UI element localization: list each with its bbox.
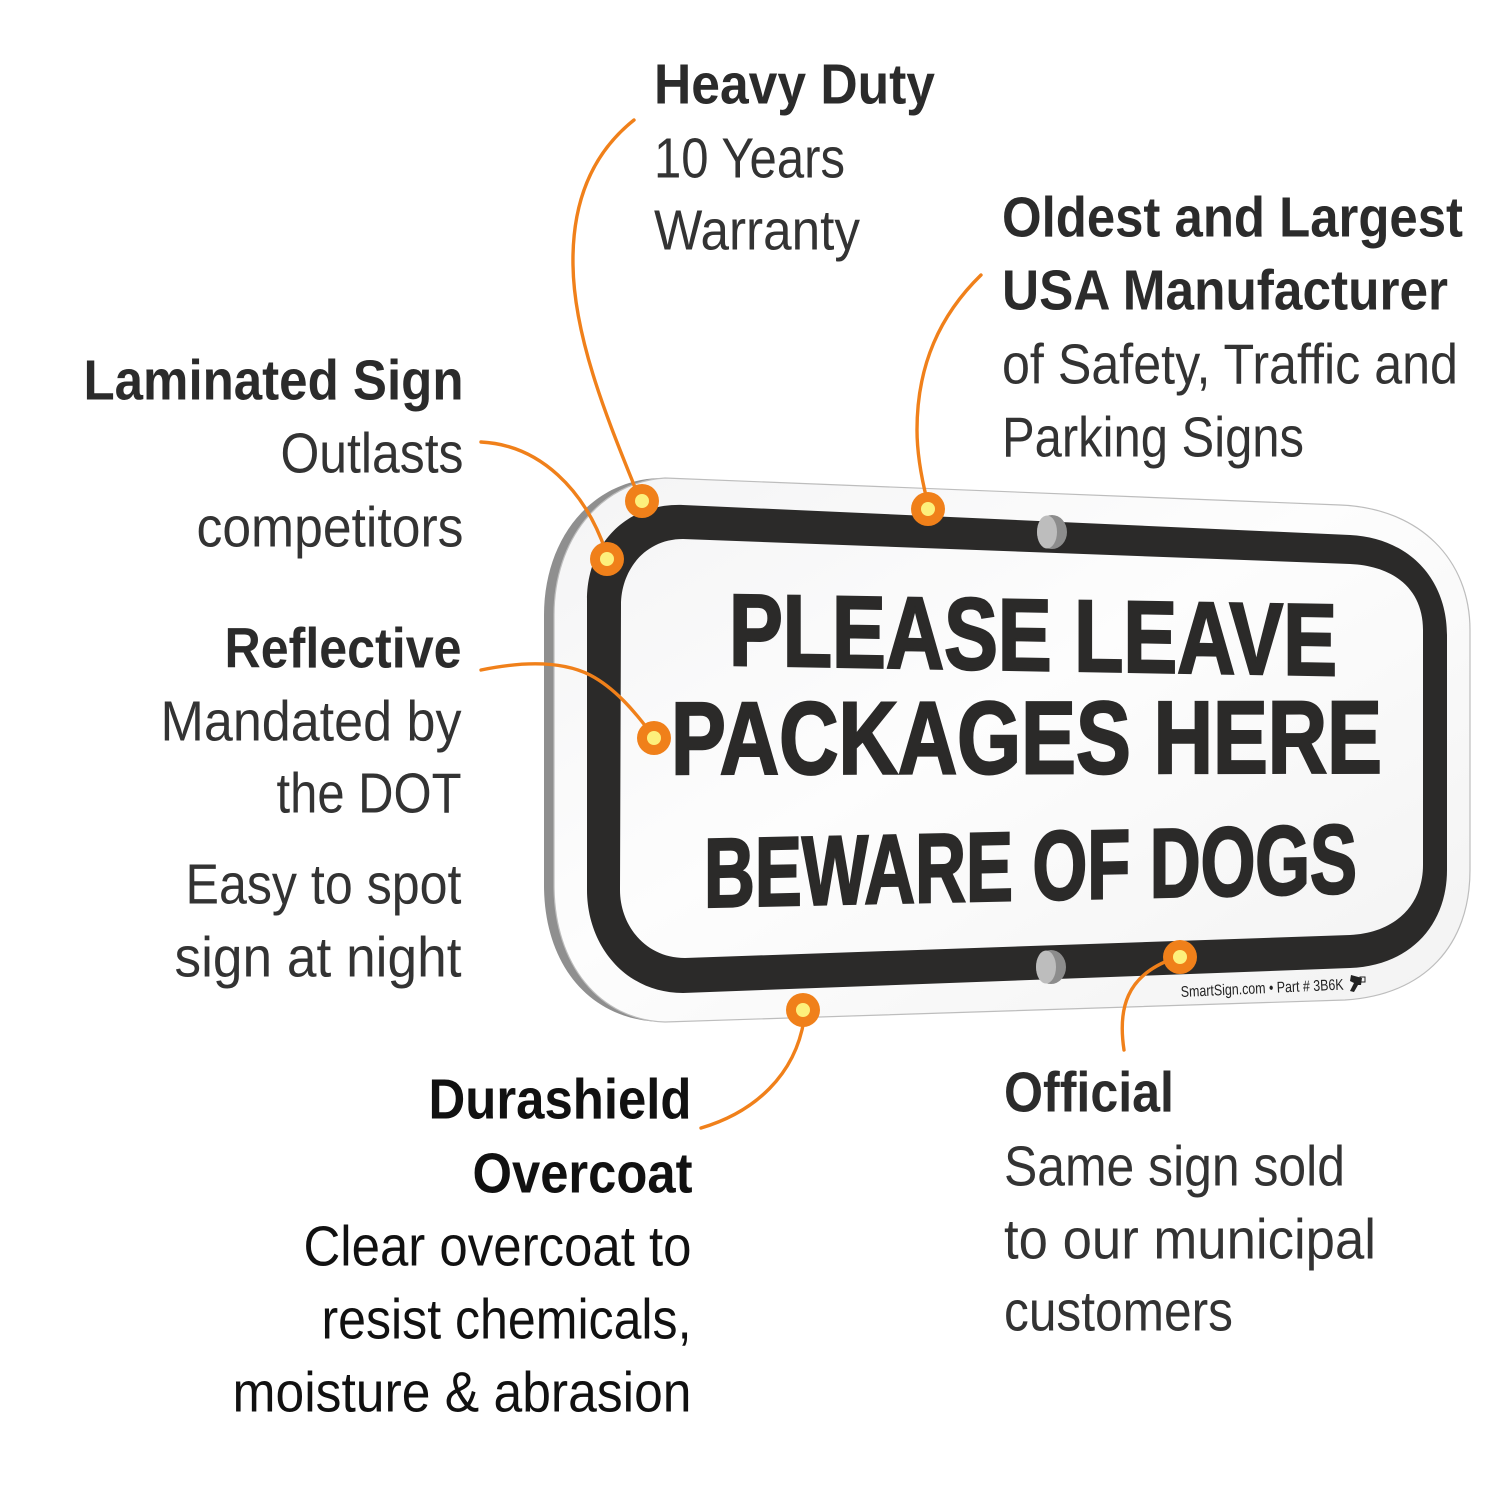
- callout line: oldest and largest: [917, 275, 981, 500]
- callout text: heavy duty: Heavy Duty: [654, 52, 935, 116]
- callout text: laminated sign: competitors: [196, 496, 464, 560]
- callout text: official: to our municipal: [1004, 1208, 1376, 1272]
- sign face: [554, 478, 1470, 1022]
- marker: heavy duty: [625, 484, 659, 518]
- callout text: durashield overcoat: resist chemicals,: [322, 1288, 692, 1352]
- callout text: durashield overcoat: Overcoat: [472, 1142, 693, 1206]
- callout text: official: [1004, 1060, 1376, 1344]
- callout line: reflective: [481, 664, 650, 732]
- mounting hole bottom: [1036, 950, 1066, 984]
- sign: [544, 478, 1470, 1022]
- callout text: official: Official: [1004, 1060, 1174, 1124]
- callout text: laminated sign: [84, 348, 464, 560]
- sign edge thickness: [544, 478, 700, 1022]
- callout text: durashield overcoat: Clear overcoat to: [304, 1214, 692, 1278]
- callout text: oldest and largest: USA Manufacturer: [1002, 258, 1448, 322]
- sign part number: SmartSign.com • Part # 3B6K: [1180, 977, 1345, 1001]
- black border band: [587, 505, 1447, 993]
- marker: durashield: [786, 993, 820, 1027]
- callout text: heavy duty: 10 Years: [654, 126, 845, 190]
- sign line 1: PLEASE LEAVE: [729, 573, 1337, 697]
- callout text: durashield overcoat: Durashield: [428, 1068, 692, 1132]
- callout text: durashield overcoat: [232, 1068, 693, 1424]
- callout line: laminated: [481, 442, 606, 552]
- marker: reflective: [637, 721, 671, 755]
- callout text: reflective: Reflective: [224, 616, 462, 680]
- callout text: oldest and largest: [1002, 186, 1463, 470]
- mounting hole top: [1037, 515, 1067, 549]
- callout text: reflective: Mandated by: [160, 690, 462, 754]
- callout text: reflective: Easy to spot: [186, 852, 462, 916]
- callout text: durashield overcoat: moisture & abrasion: [232, 1360, 692, 1424]
- callout text: reflective: sign at night: [174, 926, 462, 990]
- callout line: official: [1122, 958, 1175, 1050]
- marker: oldest and largest: [911, 492, 945, 526]
- callout text: heavy duty: [654, 52, 935, 262]
- callout line: heavy duty: [573, 120, 636, 490]
- callout text: official: customers: [1004, 1280, 1233, 1344]
- callout text: laminated sign: Outlasts: [280, 422, 464, 486]
- callout text: oldest and largest: Parking Signs: [1002, 406, 1304, 470]
- callout text: official: Same sign sold: [1004, 1134, 1345, 1198]
- callout text: laminated sign: Laminated Sign: [84, 348, 464, 412]
- marker: laminated: [590, 542, 624, 576]
- sign message: [671, 573, 1382, 928]
- callout line: durashield: [701, 1020, 804, 1128]
- callout text: heavy duty: Warranty: [654, 198, 860, 262]
- marker: official: [1163, 940, 1197, 974]
- callout text: reflective: the DOT: [276, 762, 462, 826]
- callout text: reflective: [160, 616, 462, 990]
- icon: security camera logo: [1350, 975, 1365, 992]
